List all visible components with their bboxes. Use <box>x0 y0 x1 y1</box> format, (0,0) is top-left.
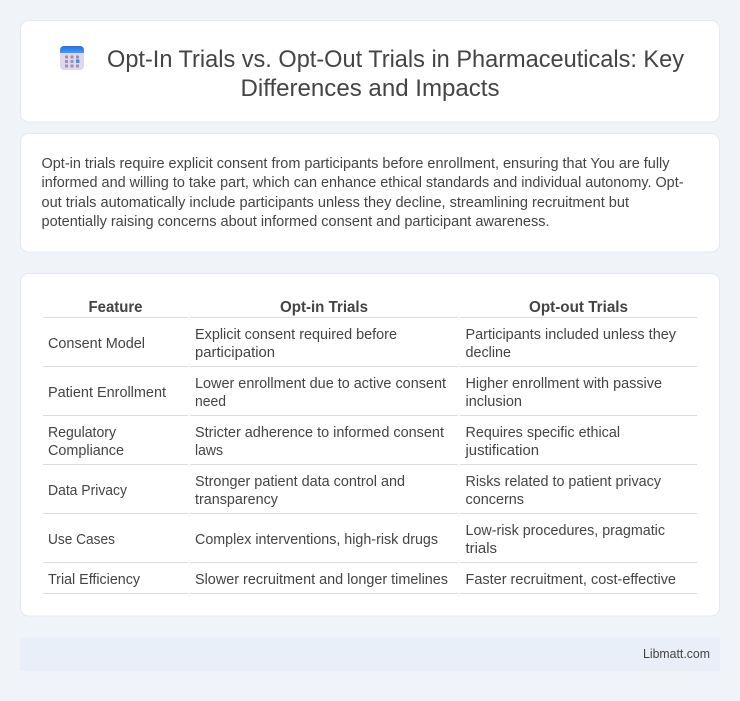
row: data privacy: Data Privacy <box>48 483 128 499</box>
row: patient enrollment: need <box>195 394 226 410</box>
row: trial efficiency: Slower recruitment and longer timelines <box>195 572 448 588</box>
row: trial efficiency <box>43 572 697 594</box>
row: patient enrollment: Patient Enrollment <box>48 385 166 401</box>
row: use cases <box>43 523 697 562</box>
row: data privacy <box>43 474 697 514</box>
panel: comparison table <box>20 274 720 616</box>
title: Opt-In Trials vs. Opt-Out Trials in Pharmaceuticals: Key <box>107 46 684 73</box>
row: trial efficiency: Trial Efficiency <box>48 572 141 588</box>
row: consent model: Consent Model <box>48 336 145 352</box>
row: data privacy: transparency <box>195 492 279 508</box>
row: consent model: Explicit consent required before <box>195 327 397 343</box>
row: use cases: Use Cases <box>48 532 115 548</box>
intro paragraph: informed and willing to take part, which can enhance ethical standards and individual autonomy. Opt- <box>42 175 684 191</box>
row: regulatory compliance: Regulatory <box>48 425 117 441</box>
row: regulatory compliance: laws <box>195 443 223 459</box>
panel: intro text <box>20 134 720 252</box>
row: consent model: Participants included unless they <box>466 327 677 343</box>
intro paragraph <box>42 156 684 230</box>
row: data privacy: Risks related to patient privacy <box>466 474 662 490</box>
row: use cases: Low-risk procedures, pragmatic <box>466 523 665 539</box>
row: regulatory compliance: justification <box>464 443 539 459</box>
intro paragraph: out trials automatically include participants unless they decline, streamlining recruitment but <box>42 195 629 211</box>
footer bar: Libmatt.com <box>643 647 710 661</box>
table header row: Opt-out Trials <box>529 299 628 316</box>
title: Differences and Impacts <box>240 75 500 102</box>
row: consent model: participation <box>195 345 275 361</box>
table header row: Opt-in Trials <box>280 299 368 316</box>
row: data privacy: Stronger patient data control and <box>195 474 405 490</box>
row: trial efficiency: Faster recruitment, cost-effective <box>466 572 676 588</box>
row: patient enrollment: inclusion <box>466 394 522 410</box>
row: patient enrollment <box>43 376 697 416</box>
row: regulatory compliance: Requires specific ethical <box>466 425 620 441</box>
row: use cases: Complex interventions, high-risk drugs <box>195 532 438 548</box>
row: consent model: decline <box>466 345 511 361</box>
row: use cases: trials <box>466 541 497 557</box>
table header row: Feature <box>88 299 143 316</box>
panel: title header <box>20 20 720 122</box>
title <box>107 46 684 102</box>
icon: calendar <box>60 46 84 70</box>
row: patient enrollment: Lower enrollment due to active consent <box>195 376 446 392</box>
row: data privacy: concerns <box>466 492 524 508</box>
intro paragraph: Opt-in trials require explicit consent from participants before enrollment, ensuring that You are fully <box>42 156 670 172</box>
row: patient enrollment: Higher enrollment with passive <box>466 376 662 392</box>
table header row <box>43 299 697 318</box>
footer bar <box>20 638 720 671</box>
intro paragraph: potentially raising concerns about informed consent and participant awareness. <box>42 214 550 230</box>
row: regulatory compliance: Stricter adherence to informed consent <box>195 425 444 441</box>
row: consent model <box>43 327 697 366</box>
row: regulatory compliance: Compliance <box>48 443 124 459</box>
row: regulatory compliance <box>43 425 697 464</box>
